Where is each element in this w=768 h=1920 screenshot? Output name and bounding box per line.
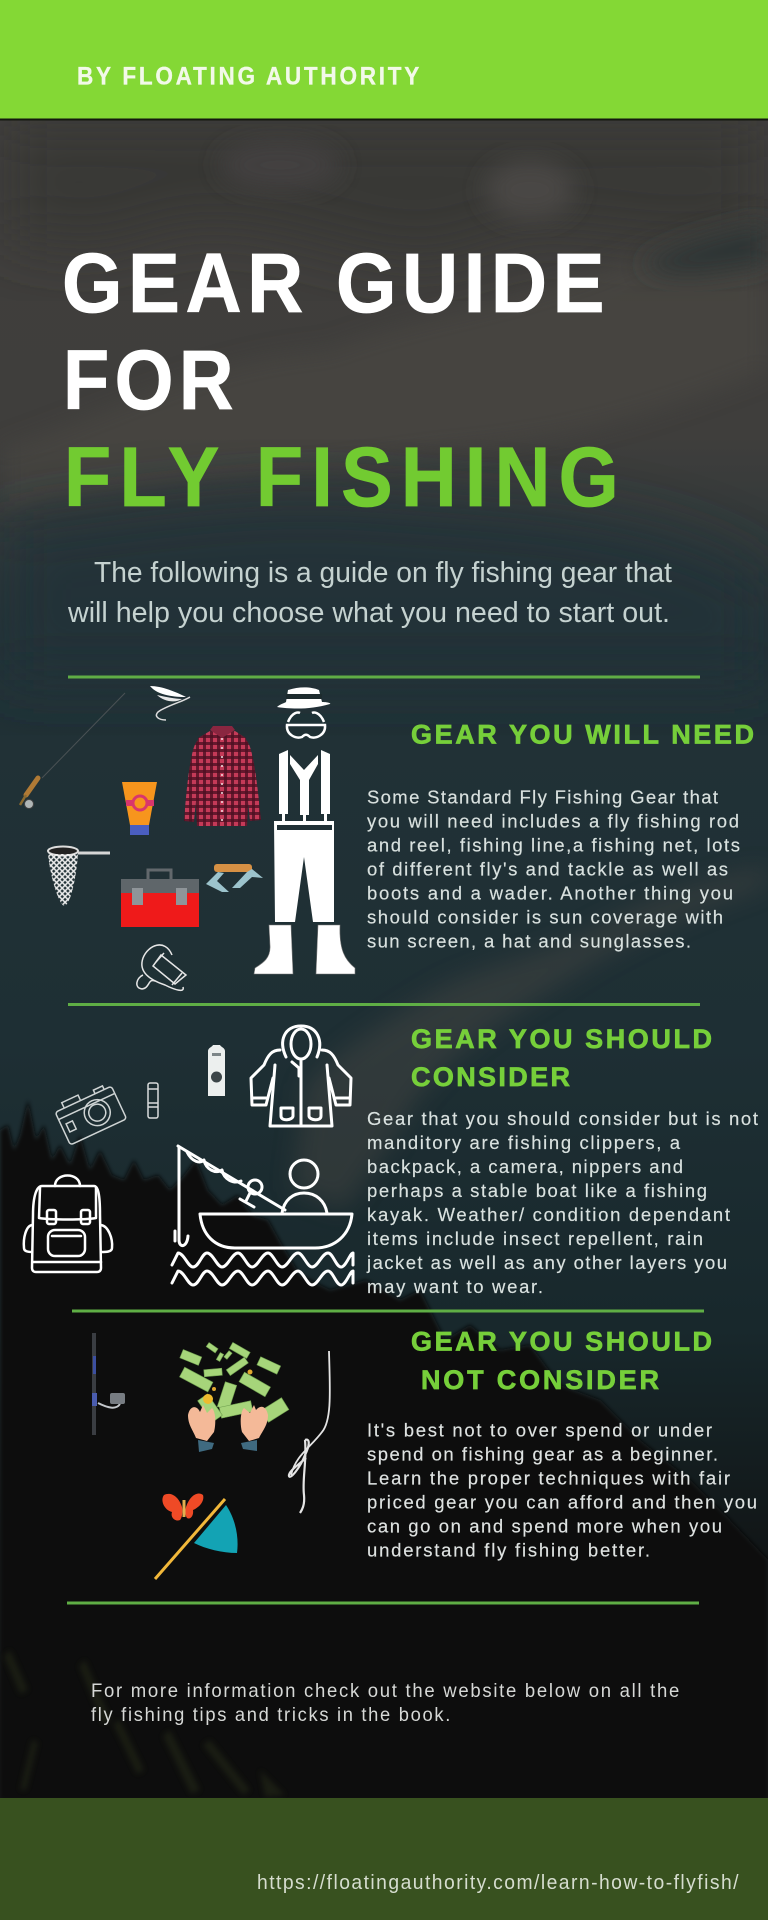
icon: spinning rod [92, 1333, 125, 1435]
body text: sun screen, a hat and sunglasses. [367, 930, 691, 952]
icon: suspenders [279, 750, 330, 822]
body text: may want to wear. [367, 1276, 543, 1297]
body text: jacket as well as any other layers you [366, 1252, 727, 1273]
body text: backpack, a camera, nippers and [367, 1156, 683, 1177]
icon: hands with money [180, 1342, 289, 1452]
icon: plaid shirt [184, 726, 261, 826]
body text: priced gear you can afford and then you [367, 1492, 757, 1512]
body text: manditory are fishing clippers, a [367, 1132, 681, 1153]
body text: It's best not to over spend or under [367, 1420, 712, 1440]
website link: https://floatingauthority.com/learn-how-to-flyfish/ [257, 1872, 740, 1894]
icon: fly rod [20, 693, 125, 808]
heading: GEAR YOU WILL NEED [411, 720, 754, 750]
icon: sunglasses [287, 713, 325, 738]
icon: multi-tool [206, 864, 263, 892]
intro text: The following is a guide on fly fishing gear that [94, 557, 672, 589]
closing note [91, 1680, 681, 1726]
icon: camera [53, 1081, 127, 1145]
figure: angler outfit [254, 687, 355, 974]
body text: of different fly's and tackle as well as [367, 858, 728, 880]
byline: BY FLOATING AUTHORITY [77, 62, 422, 90]
icon: backpack [24, 1176, 112, 1272]
intro text: will help you choose what you need to start out. [67, 597, 670, 629]
body text: kayak. Weather/ condition dependant [367, 1204, 730, 1225]
heading: GEAR YOU SHOULD [411, 1326, 712, 1356]
closing note: fly fishing tips and tricks in the book. [91, 1704, 452, 1726]
intro text [67, 557, 672, 629]
forest silhouette [0, 1100, 768, 1800]
heading [411, 1024, 712, 1092]
heading: GEAR YOU SHOULD [411, 1024, 712, 1054]
icon: sunscreen tube [122, 782, 157, 835]
icon: fishing boat [172, 1146, 353, 1285]
panel: gear you will need [20, 686, 754, 990]
body text: Some Standard Fly Fishing Gear that [367, 786, 718, 808]
icon: fly lure [150, 686, 190, 720]
icon: insect repellent can [208, 1045, 225, 1096]
body text: items include insect repellent, rain [367, 1228, 703, 1249]
body text: understand fly fishing better. [367, 1540, 650, 1560]
body text [367, 786, 740, 952]
body text: boots and a wader. Another thing you [367, 882, 733, 904]
lower left texture [4, 1650, 285, 1797]
closing note: For more information check out the website below on all the [91, 1680, 681, 1702]
panel: gear you should not consider [92, 1326, 757, 1579]
body text: Learn the proper techniques with fair [367, 1468, 730, 1488]
panel: gear you should consider [24, 1024, 758, 1297]
icon: fishing line spool [137, 945, 186, 990]
footer band [0, 1798, 768, 1920]
title: GEAR GUIDE [62, 236, 610, 330]
body text: should consider is sun coverage with [367, 906, 723, 928]
header band [0, 0, 768, 120]
icon: rain jacket [251, 1026, 351, 1126]
icon: nippers [148, 1083, 158, 1118]
body text: you will need includes a fly fishing rod [367, 810, 739, 832]
icon: boots [254, 925, 355, 974]
body text: Gear that you should consider but is not [367, 1108, 758, 1129]
icon: hat [277, 687, 330, 709]
icon: butterfly and net [155, 1494, 238, 1579]
heading [411, 1326, 712, 1395]
light river streak [292, 868, 768, 1210]
body text: perhaps a stable boat like a fishing [367, 1180, 707, 1201]
title [62, 236, 627, 524]
icon: waders [274, 821, 334, 922]
title: FLY FISHING [64, 430, 627, 524]
heading: NOT CONSIDER [421, 1365, 659, 1395]
body text: and reel, fishing line,a fishing net, lots [367, 834, 740, 856]
body text: can go on and spend more when you [367, 1516, 722, 1536]
icon: landing net [48, 846, 110, 906]
icon: red toolbox [121, 870, 199, 927]
title: FOR [63, 333, 239, 427]
body text [367, 1420, 757, 1560]
icon: knotted line [289, 1351, 330, 1513]
body text [366, 1108, 758, 1297]
body text: spend on fishing gear as a beginner. [367, 1444, 718, 1464]
heading: CONSIDER [411, 1062, 570, 1092]
